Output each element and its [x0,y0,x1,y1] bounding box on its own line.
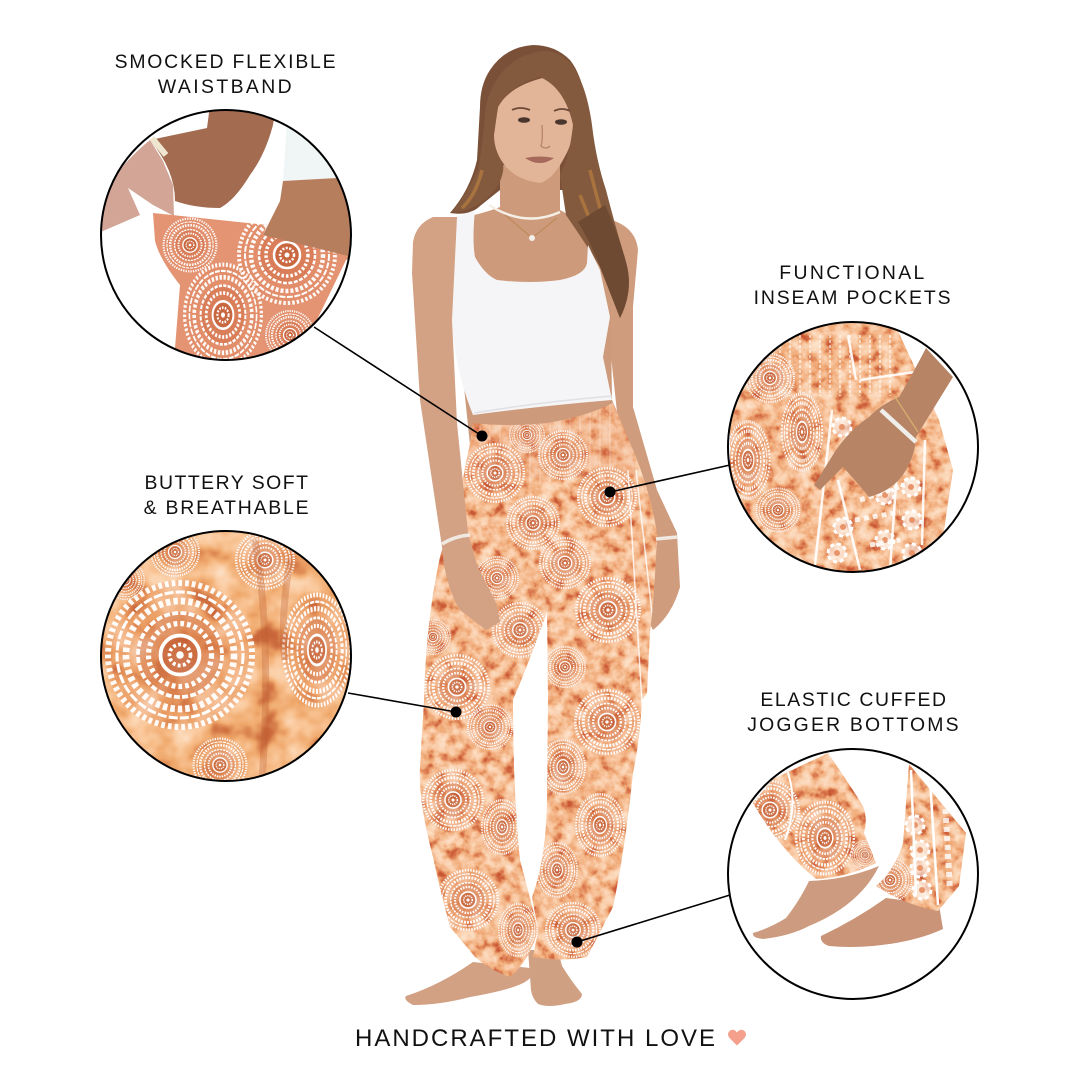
hair back [450,45,612,250]
torso [263,178,355,262]
callout: functional inseam pockets [604,262,980,575]
heading: pockets: INSEAM POCKETS [754,287,952,309]
hair front [452,51,629,318]
pointer line [610,465,730,492]
circle outline [728,749,978,999]
pocket fabric [726,320,958,575]
detail circle: fabric [100,527,352,792]
large mandala [105,580,255,730]
heading: fabric: BUTTERY SOFT [145,472,309,494]
circle outline [728,322,978,572]
heading: waistband: WAISTBAND [158,76,294,98]
heading: cuffs: ELASTIC CUFFED [760,689,948,711]
brows and eyes [512,108,570,111]
white tank [283,127,336,181]
callout: smocked flexible waistband [95,51,488,442]
model figure [405,45,680,1006]
patterned pants [420,403,657,977]
pointer dot [450,706,462,718]
footer tagline: HANDCRAFTED WITH LOVE [355,1025,717,1052]
left cuff fabric [753,753,876,879]
hair highlights [462,170,619,305]
pointer dot [604,486,616,498]
white crop top [452,210,612,415]
hand in pocket [814,348,953,497]
nose and lips [541,125,550,148]
circle outline [101,110,351,360]
torso skin [455,165,625,445]
icon: heart [728,1030,746,1046]
feet [405,962,530,1005]
heading: fabric: & BREATHABLE [144,497,310,519]
detail circle: waistband [95,105,355,368]
pointer dot [476,430,488,442]
bracelets [442,535,677,544]
right arm [605,220,680,630]
waistband fabric [153,213,348,359]
bracelet [152,138,166,155]
heading: waistband: SMOCKED FLEXIBLE [115,51,337,73]
detail circle: cuffs [752,753,966,947]
detail circle: pockets [730,323,953,571]
right cuff fabric [876,764,966,911]
heading: pockets: FUNCTIONAL [779,262,927,284]
pointer line [348,693,456,712]
circle outline [101,531,351,781]
fabric folds [255,540,290,780]
face [493,77,575,183]
right foot [821,898,943,947]
callout: elastic cuffed jogger bottoms [572,689,980,1000]
heading: cuffs: JOGGER BOTTOMS [747,714,961,736]
pointer line [314,327,482,436]
arm [150,105,276,208]
pointer dot [572,936,582,948]
left foot [753,866,879,939]
pointer line [577,895,730,942]
callout: buttery soft and breathable [100,472,462,792]
bracelets [881,410,916,442]
hand [95,140,174,232]
left arm and hand [412,217,500,630]
necklaces [489,205,560,219]
hair over shoulder [578,205,629,318]
